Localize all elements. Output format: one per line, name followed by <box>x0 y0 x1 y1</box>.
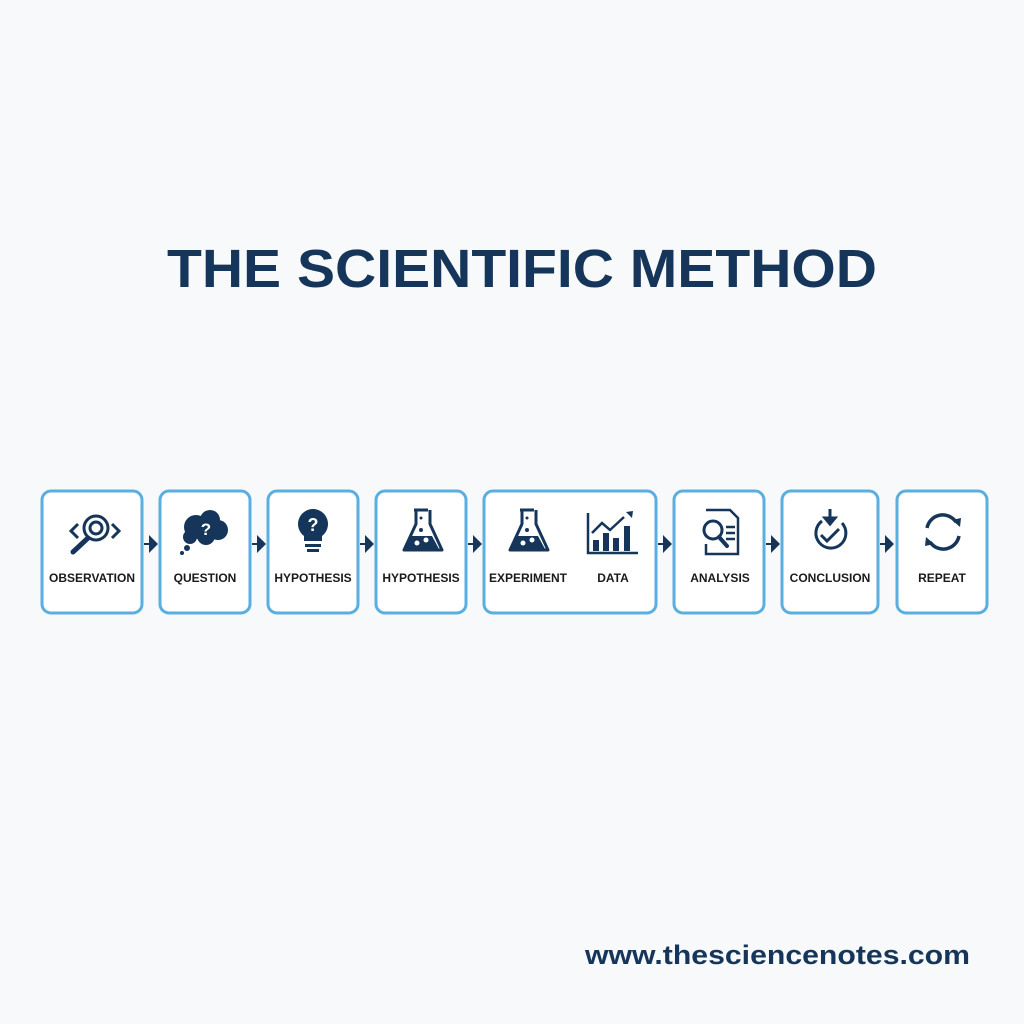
panel: hypothesis <box>268 491 358 613</box>
arrow <box>766 535 780 553</box>
flow diagram <box>42 491 987 613</box>
icon: cycle arrows <box>925 515 961 549</box>
panel: question <box>160 491 250 613</box>
panel: experiment + data: DATA <box>597 571 629 585</box>
icon: thought cloud: ? <box>201 520 211 539</box>
arrow <box>252 535 266 553</box>
panel: repeat <box>897 491 987 613</box>
panel: repeat: REPEAT <box>918 571 967 585</box>
icon: flask <box>403 510 442 550</box>
panel: observation <box>42 491 142 613</box>
panel: analysis: ANALYSIS <box>690 571 750 585</box>
panel: experiment + data <box>484 491 656 613</box>
panel: hypothesis 2 <box>376 491 466 613</box>
footer url: www.thesciencenotes.com <box>584 940 970 970</box>
icon: flask <box>509 510 548 550</box>
arrow <box>880 535 894 553</box>
panel: question: QUESTION <box>174 571 236 585</box>
panel: hypothesis: HYPOTHESIS <box>274 571 352 585</box>
arrow <box>360 535 374 553</box>
panel: hypothesis 2: HYPOTHESIS <box>382 571 460 585</box>
arrow <box>658 535 672 553</box>
arrow <box>144 535 158 553</box>
panel: analysis <box>674 491 764 613</box>
panel: experiment + data: EXPERIMENT <box>489 571 568 585</box>
icon: eye with magnifier <box>71 516 119 552</box>
panel: observation: OBSERVATION <box>49 571 135 585</box>
icon: document with magnifier <box>704 510 738 554</box>
icon: light bulb: ? <box>308 515 318 535</box>
title: THE SCIENTIFIC METHOD <box>167 239 877 299</box>
arrow <box>468 535 482 553</box>
icon: check with arrow <box>816 509 846 548</box>
panel: conclusion: CONCLUSION <box>790 571 870 585</box>
icon: bar chart <box>588 511 638 553</box>
panel: conclusion <box>782 491 878 613</box>
